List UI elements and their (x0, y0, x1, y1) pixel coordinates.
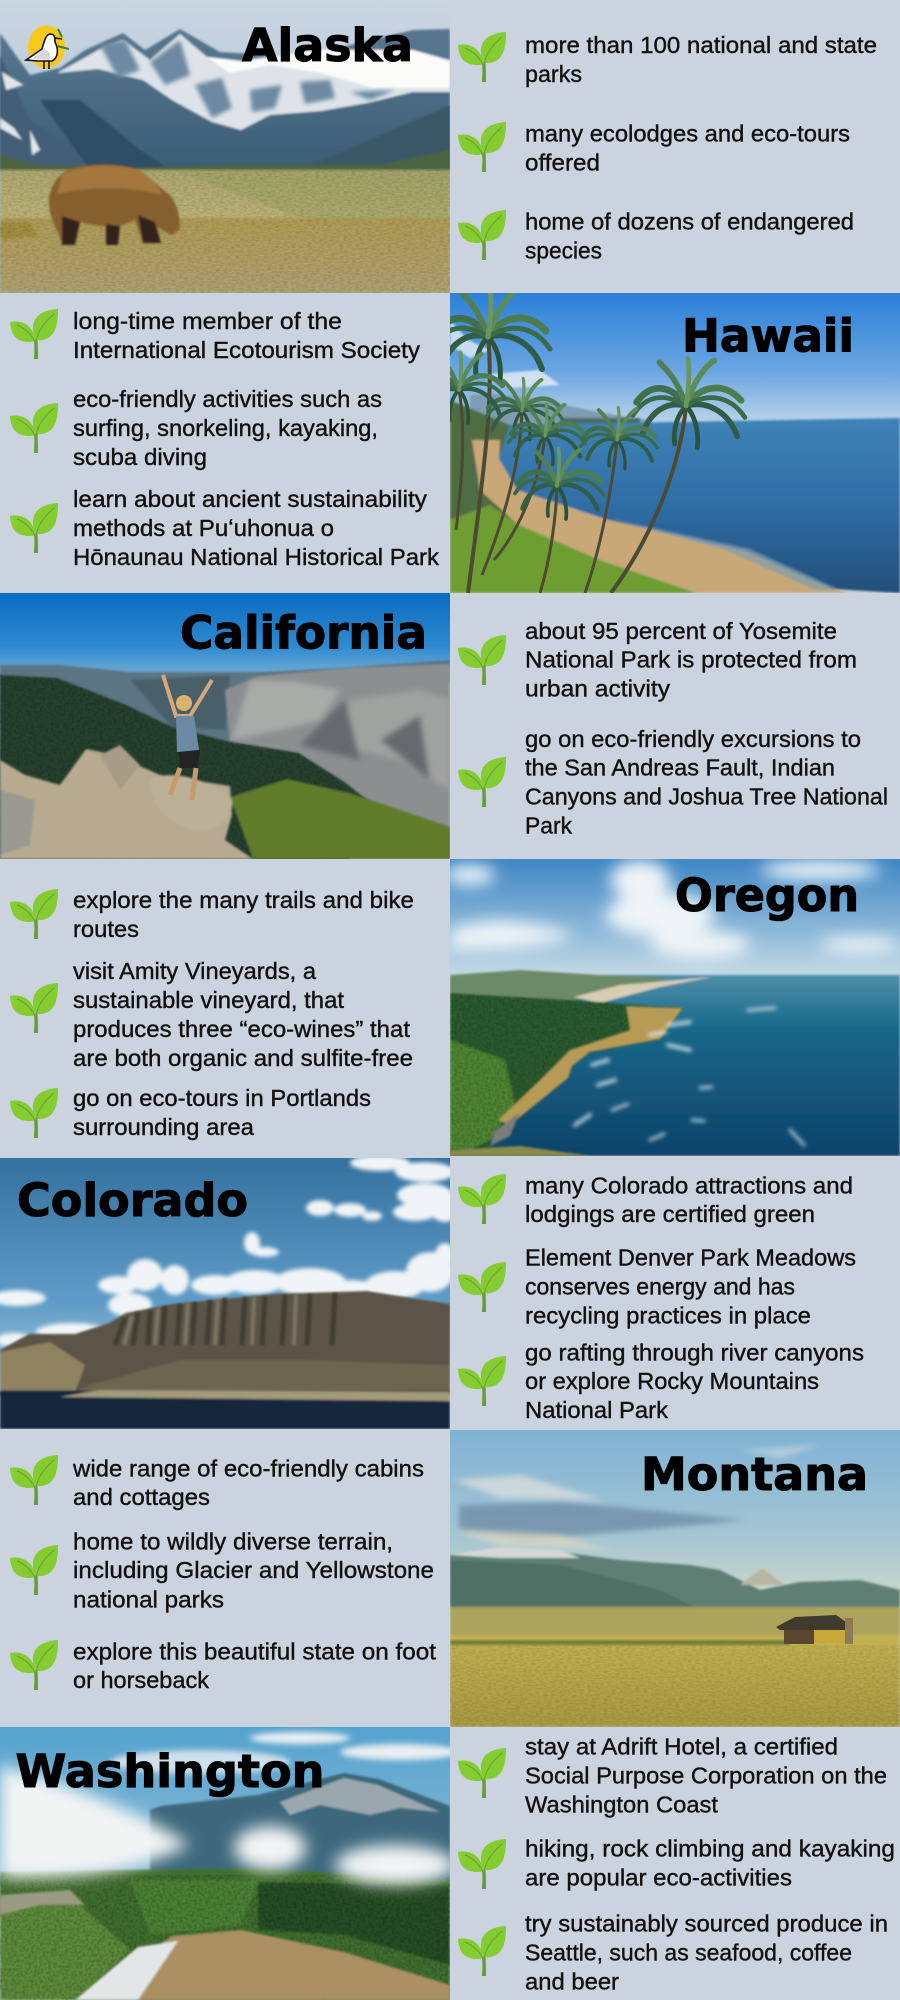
house (776, 1615, 853, 1644)
text: Yosemite (525, 618, 857, 702)
icon: seedling (458, 1926, 506, 1976)
text: rafting (525, 1340, 864, 1423)
text: activities: eco-friendly activities such as (73, 386, 382, 412)
text: Adrift Hotel: stay at Adrift Hotel, a certified (525, 1734, 838, 1760)
text: ecotourism society (73, 308, 420, 363)
text: eco-tours (73, 1085, 371, 1140)
text: Adrift Hotel: Social Purpose Corporation on the (525, 1762, 887, 1788)
bullets: Hawaii (10, 308, 439, 570)
text: foot or horseback: explore this beautiful state on foot (73, 1638, 436, 1664)
text: Amity Vineyards: produces three “eco-wines” that (73, 1016, 410, 1042)
text: parks (525, 32, 877, 87)
text: ecolodges: many ecolodges and eco-tours (525, 120, 850, 146)
text: ecolodges (525, 120, 850, 176)
bear (49, 164, 180, 245)
icon: seedling (10, 1640, 58, 1690)
text: Adrift Hotel: Washington Coast (525, 1792, 718, 1818)
text: activities: scuba diving (73, 444, 207, 470)
panel: Alaska photo (0, 0, 450, 293)
panel: Colorado photo (0, 1155, 461, 1429)
text: produce: Seattle, such as seafood, coffee (525, 1940, 852, 1966)
bullets: Washington (458, 1734, 895, 1994)
logo: seagull badge (26, 26, 69, 69)
text: terrain: national parks (73, 1586, 224, 1612)
text: parks: parks (525, 61, 582, 87)
text: produce (525, 1910, 888, 1994)
panel: California photo (0, 593, 450, 860)
text: Element Denver (525, 1244, 856, 1328)
text: ancient methods: Hōnaunau National Historical Park (73, 544, 439, 570)
text: excursions: Canyons and Joshua Tree National (525, 784, 888, 810)
text: Amity Vineyards (73, 958, 413, 1071)
text: certified green (525, 1172, 853, 1227)
text: terrain: home to wildly diverse terrain, (73, 1528, 393, 1554)
icon: seedling (10, 889, 58, 939)
panel: Montana photo (450, 1430, 900, 1727)
text: activities (73, 386, 382, 470)
text: parks: more than 100 national and state (525, 32, 877, 58)
icon: seedling (10, 1088, 58, 1138)
text: trails: explore the many trails and bike (73, 887, 414, 913)
text: eco-tours: surrounding area (73, 1114, 255, 1140)
text: trails (73, 887, 414, 942)
text: foot or horseback: or horseback (73, 1667, 209, 1693)
person with raised arms (163, 675, 212, 800)
bullets: Colorado (458, 1172, 864, 1423)
text: endangered species: species (525, 238, 602, 264)
icon: seedling (10, 1545, 58, 1595)
text: ancient methods: methods at Puʻuhonua o (73, 515, 334, 541)
text: Element Denver: conserves energy and has (525, 1274, 795, 1300)
bullets: Alaska (458, 32, 877, 264)
title: Hawaii: Hawaii (682, 310, 854, 362)
surf (575, 1008, 804, 1145)
text: ecotourism society: long-time member of the (73, 308, 342, 334)
text: hiking: are popular eco-activities (525, 1864, 792, 1890)
icon: seedling (458, 122, 506, 172)
text: cabins: and cottages (73, 1484, 210, 1510)
text: Amity Vineyards: are both organic and sulfite-free (73, 1045, 413, 1071)
text: cabins (72, 1456, 424, 1510)
icon: seedling (10, 503, 58, 553)
text: Yosemite: National Park is protected from (525, 646, 857, 672)
title: Colorado: Colorado (17, 1174, 248, 1227)
text: excursions: go on eco-friendly excursions to (525, 726, 861, 752)
icon: seedling (458, 757, 506, 807)
bullets: Oregon (10, 887, 414, 1140)
text: activities: surfing, snorkeling, kayaking, (73, 415, 378, 441)
text: rafting: or explore Rocky Mountains (525, 1368, 819, 1394)
text: hiking: hiking, rock climbing and kayaking (525, 1836, 895, 1862)
bullets: Montana (10, 1455, 436, 1693)
icon: seedling (10, 309, 58, 359)
text: ecolodges: offered (525, 150, 600, 176)
text: certified green: lodgings are certified green (525, 1201, 815, 1227)
text: certified green: many Colorado attractions and (525, 1172, 853, 1198)
icon: seedling (458, 1174, 506, 1224)
text: eco-tours: go on eco-tours in Portlands (73, 1085, 371, 1111)
text: endangered species (525, 208, 854, 264)
text: rafting: National Park (525, 1397, 668, 1423)
panel: Hawaii photo (417, 287, 900, 593)
title: Washington: Washington (16, 1745, 324, 1798)
title: Oregon: Oregon (675, 869, 859, 922)
text: ancient methods (73, 486, 439, 570)
icon: seedling (458, 32, 506, 82)
bullets: California (458, 618, 888, 838)
title: Alaska: Alaska (242, 19, 413, 72)
icon: seedling (458, 210, 506, 260)
title: Montana: Montana (641, 1448, 868, 1501)
text: produce: try sustainably sourced produce in (525, 1910, 888, 1936)
text: Yosemite: urban activity (525, 676, 670, 702)
icon: seedling (458, 1262, 506, 1312)
text: rafting: go rafting through river canyons (525, 1340, 864, 1366)
panel: Washington photo (0, 1727, 460, 2000)
text: ancient methods: learn about ancient sustainability (73, 486, 427, 512)
text: Element Denver: recycling practices in place (525, 1302, 811, 1328)
text: produce: and beer (525, 1968, 619, 1994)
text: terrain (73, 1528, 434, 1612)
icon: seedling (458, 1356, 506, 1406)
text: ecotourism society: International Ecotourism Society (73, 337, 420, 363)
icon: seedling (458, 1748, 506, 1798)
text: excursions (525, 726, 888, 838)
text: excursions: Park (525, 812, 572, 838)
icon: seedling (10, 1455, 58, 1505)
text: trails: routes (73, 916, 139, 942)
icon: seedling (10, 983, 58, 1033)
text: terrain: including Glacier and Yellowstone (73, 1557, 434, 1583)
text: Element Denver: Element Denver Park Meadows (525, 1244, 856, 1270)
text: cabins: wide range of eco-friendly cabins (72, 1456, 424, 1482)
icon: seedling (458, 635, 506, 685)
text: hiking (525, 1836, 895, 1890)
text: Amity Vineyards: sustainable vineyard, that (73, 987, 344, 1013)
title: California: California (180, 606, 427, 660)
text: Yosemite: about 95 percent of Yosemite (525, 618, 837, 644)
text: endangered species: home of dozens of endangered (525, 208, 854, 234)
text: excursions: the San Andreas Fault, Indian (525, 754, 835, 780)
text: Adrift Hotel (525, 1734, 887, 1818)
panel: Oregon photo (445, 859, 900, 1156)
text: foot or horseback (73, 1638, 436, 1693)
palm trees (450, 293, 748, 593)
icon: seedling (458, 1839, 506, 1889)
icon: seedling (10, 403, 58, 453)
text: Amity Vineyards: visit Amity Vineyards, a (73, 958, 317, 984)
